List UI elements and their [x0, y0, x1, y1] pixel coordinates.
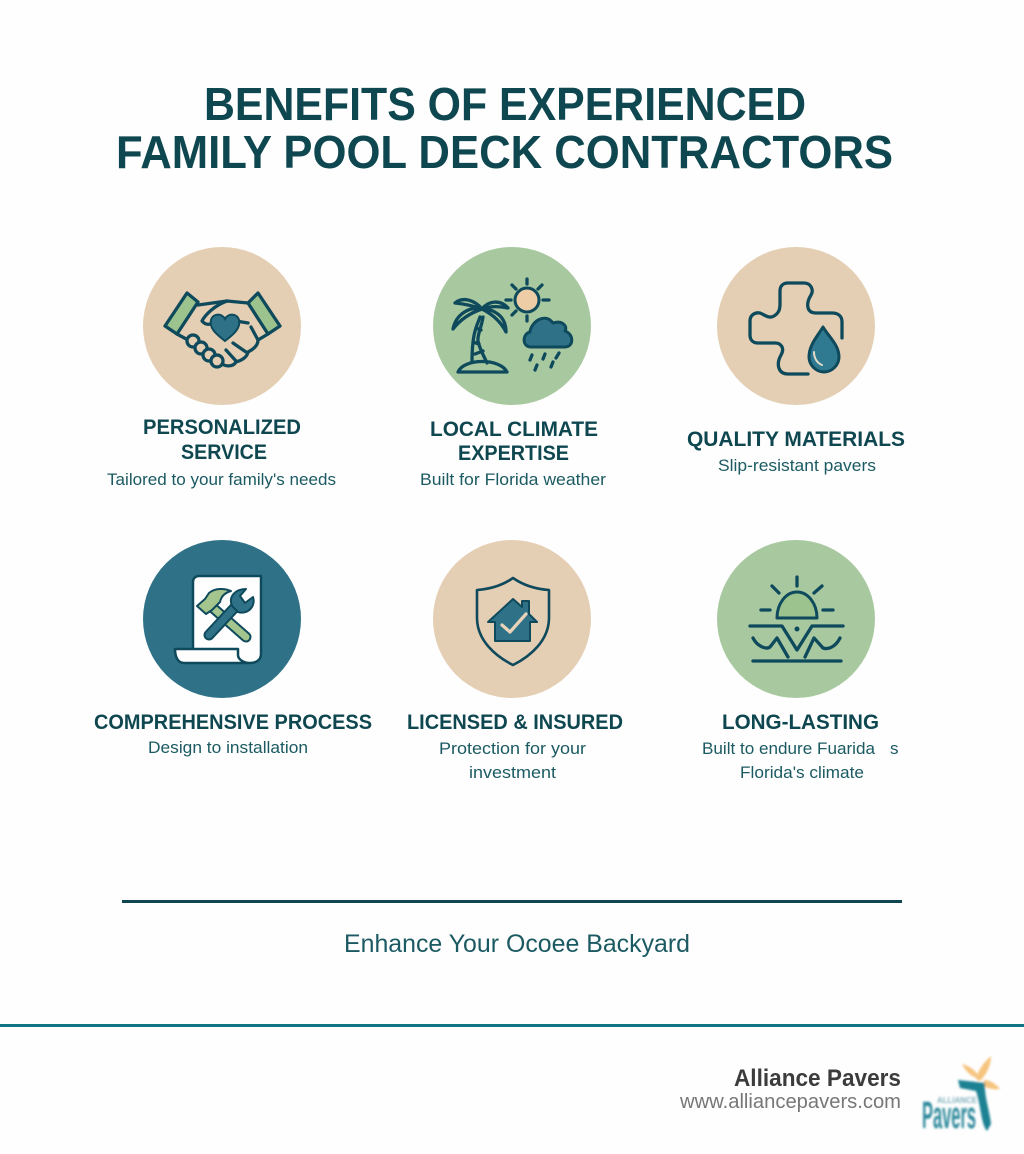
- description: investment: [469, 763, 556, 782]
- icon: sun over waves: [717, 540, 875, 698]
- panel: local climate expertise: [420, 247, 606, 489]
- heading: LICENSED & INSURED: [407, 711, 623, 734]
- description: Florida's climate: [740, 763, 864, 782]
- description: Slip-resistant pavers: [718, 456, 876, 475]
- heading: COMPREHENSIVE PROCESS: [94, 711, 372, 734]
- heading: PERSONALIZED: [143, 416, 301, 439]
- description: s: [890, 739, 898, 758]
- panel: comprehensive process: [94, 540, 372, 757]
- heading: [430, 418, 598, 465]
- icon: shield with house and check: [433, 540, 591, 698]
- footer: [679, 1056, 1000, 1137]
- logo: ALLIANCE: [937, 1096, 978, 1105]
- panel: personalized service: [107, 247, 336, 489]
- heading: LOCAL CLIMATE: [430, 418, 598, 441]
- title: [116, 78, 893, 178]
- panel: long-lasting: [702, 540, 898, 782]
- panel: quality materials: [687, 247, 905, 475]
- description: Design to installation: [148, 738, 308, 757]
- logo: [922, 1056, 1000, 1137]
- icon: puzzle cross with water drop: [717, 247, 875, 405]
- heading: LONG-LASTING: [722, 711, 879, 734]
- heading: QUALITY MATERIALS: [687, 428, 905, 451]
- heading: [143, 416, 301, 464]
- tagline: Enhance Your Ocoee Backyard: [344, 930, 690, 958]
- icon: document with hammer and wrench: [143, 540, 301, 698]
- title: FAMILY POOL DECK CONTRACTORS: [116, 126, 893, 178]
- icon: handshake with heart: [143, 247, 301, 405]
- heading: EXPERTISE: [458, 442, 569, 465]
- description: Built for Florida weather: [420, 470, 606, 489]
- footer rule: [0, 1024, 1024, 1027]
- description: [439, 739, 586, 782]
- description: [702, 739, 898, 782]
- description: Tailored to your family's needs: [107, 470, 336, 489]
- website: www.alliancepavers.com: [679, 1091, 901, 1113]
- heading: SERVICE: [181, 441, 267, 464]
- panel: licensed and insured: [407, 540, 623, 782]
- icon: palm tree with sun and cloud: [433, 247, 591, 405]
- divider rule: [122, 900, 902, 903]
- title: BENEFITS OF EXPERIENCED: [204, 78, 806, 130]
- description: Protection for your: [439, 739, 586, 758]
- brand name: Alliance Pavers: [734, 1065, 901, 1092]
- description: Built to endure Fuarida: [702, 739, 876, 758]
